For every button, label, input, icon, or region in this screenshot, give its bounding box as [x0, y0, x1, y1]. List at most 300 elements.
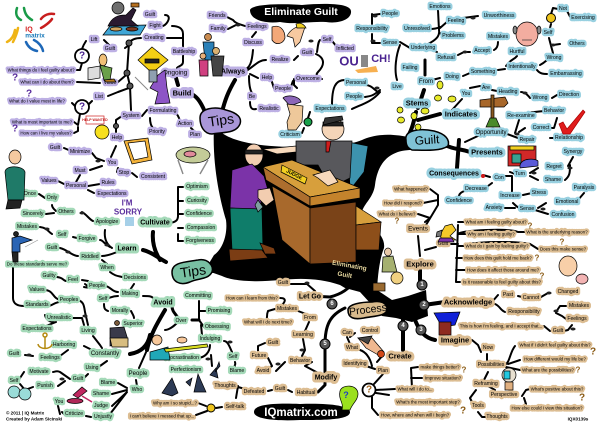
heading: Heading	[499, 89, 518, 95]
re-examine: Re-examine	[507, 113, 535, 119]
promising: Promising	[208, 308, 230, 314]
icon: green head with question	[340, 386, 358, 410]
changed: Changed	[558, 289, 578, 295]
guilt: Guilt	[145, 12, 156, 18]
plan: Plan	[378, 368, 388, 374]
explore: Explore	[406, 260, 434, 268]
control: Control	[362, 328, 378, 334]
harboring: Harboring	[53, 342, 75, 348]
question: What will I do next time?	[244, 320, 293, 324]
expectations: Expectations	[97, 191, 127, 197]
creating: Creating	[144, 35, 164, 41]
realize: Realize	[272, 57, 289, 63]
over: Over	[175, 318, 187, 324]
self: Self	[544, 30, 553, 36]
icon: sad baby	[559, 256, 588, 284]
apologize: Apologize	[96, 219, 118, 225]
relationship: Relationship	[555, 135, 583, 141]
node numbers: 2	[422, 302, 426, 308]
feeling: Feeling	[448, 18, 465, 24]
defeated: Defeated	[244, 389, 264, 395]
curiosity: Curiosity	[187, 198, 207, 204]
behavior: Behavior	[544, 108, 564, 114]
guilt: Guilt	[275, 386, 286, 392]
others: Others	[569, 41, 585, 47]
learn: Learn	[117, 246, 137, 252]
question: How does it affect those around me?	[467, 268, 540, 272]
stress: Stress	[532, 190, 547, 196]
presents: Presents	[471, 148, 503, 156]
value: Value	[104, 80, 116, 86]
question circles: ?	[79, 50, 85, 62]
morally: Morally	[112, 308, 129, 314]
icon: dark hats	[162, 362, 220, 396]
future: Future	[252, 353, 267, 359]
emotions: Emotions	[429, 4, 451, 10]
must: Must	[74, 168, 86, 174]
node numbers: 1	[420, 282, 424, 288]
self-talk: Self-talk	[226, 404, 245, 410]
refusal: Refusal	[437, 55, 455, 61]
mistakes: Mistakes	[17, 224, 37, 230]
blame: Blame	[230, 368, 244, 374]
stop: Stop	[119, 170, 129, 176]
always: Always	[221, 68, 245, 76]
icon: person with monitor	[502, 368, 516, 390]
gold question marks: ?	[560, 238, 565, 246]
question: What things do I feel guilty about?	[8, 68, 75, 72]
doing: Doing	[445, 74, 459, 80]
guilt: Guilt	[268, 340, 279, 346]
branch: presents and consequences	[429, 148, 595, 218]
mistakes: Mistakes	[569, 303, 589, 309]
purple question marks: ?	[12, 72, 18, 84]
personal: Personal	[66, 183, 86, 189]
feel: Feel	[68, 277, 78, 283]
text: i'm sorry: SORRY	[114, 208, 143, 216]
icon: magician hat	[434, 312, 460, 335]
icon: signpost	[480, 95, 508, 127]
thoughts: Thoughts	[486, 414, 508, 420]
unrealistic: Unrealistic	[47, 315, 71, 321]
you: You	[108, 160, 116, 166]
lift: Lift	[91, 37, 98, 43]
problems: Problems	[442, 33, 464, 39]
possibilities: Possibilities	[478, 362, 505, 368]
branch: process tan	[130, 280, 462, 418]
icon: critic pointing	[283, 96, 303, 130]
text: i'm sorry	[114, 198, 143, 226]
people: People	[346, 94, 362, 100]
living: Living	[81, 328, 95, 334]
behavior: Behavior	[290, 358, 310, 364]
icon: gavel	[67, 387, 92, 404]
overcome: Overcome	[296, 76, 320, 82]
stems: Stems	[406, 98, 428, 108]
icon: red check mark	[559, 110, 585, 134]
decrease: Decrease	[465, 186, 487, 192]
feelings: Feelings	[40, 355, 60, 361]
text: ouch with foot	[339, 53, 391, 73]
question: What will I do to...	[397, 386, 433, 392]
text: ouch with foot: OU	[339, 54, 359, 68]
green node	[304, 118, 312, 126]
rules: Rules	[101, 180, 115, 186]
synergy: Synergy	[564, 149, 583, 155]
icon: warning sign and knight	[135, 47, 170, 104]
icon: presenter silhouette	[12, 232, 38, 262]
let go: Let Go	[299, 294, 321, 300]
gold question marks: ?	[579, 392, 585, 404]
guilt: Guilt	[47, 245, 58, 251]
question: How does this guilt hold me back?	[464, 256, 532, 260]
direction: Direction	[559, 92, 579, 98]
icon: frustrated man with papers	[88, 54, 116, 82]
question: Improve situation?	[425, 376, 462, 380]
procrastination: Procrastination	[165, 355, 199, 361]
node numbers	[323, 282, 426, 347]
indulging: Indulging	[200, 336, 220, 342]
accept: Accept	[474, 48, 490, 54]
underlying: Underlying	[411, 45, 435, 51]
making: Making	[122, 291, 138, 297]
cultivate: Cultivate	[140, 220, 170, 226]
icon: man reclining	[150, 335, 208, 360]
riddled: Riddled	[81, 254, 99, 260]
responsibility: Responsibility	[356, 26, 388, 32]
credit: Created by Adam Sicinski	[6, 416, 62, 422]
discuss: Discuss	[244, 40, 262, 46]
red node	[481, 174, 485, 178]
fight: Fight	[149, 23, 161, 29]
criticism: Criticism	[280, 132, 300, 138]
question: How can I learn from this?	[226, 296, 278, 300]
hurtful: Hurtful	[509, 49, 525, 55]
branch: cultivate learn	[7, 184, 244, 420]
title	[250, 4, 351, 23]
priority: Priority	[149, 129, 165, 135]
map code: IQX0139s	[568, 416, 589, 422]
opportunity: Opportunity	[475, 130, 507, 136]
build: Build	[173, 88, 192, 98]
logo: iq matrix: IQ	[25, 26, 33, 34]
guilt: Guilt	[50, 145, 61, 151]
criticize: Criticize	[65, 411, 83, 417]
action: Action	[178, 121, 192, 127]
now: Now	[483, 345, 493, 351]
icon: teal heads	[8, 386, 31, 400]
guilt heading: Guilt	[414, 132, 440, 148]
help: Help	[262, 75, 272, 81]
are: Are	[482, 85, 490, 91]
question: What is most important to me?	[12, 120, 73, 124]
icon: green suited man	[5, 150, 25, 209]
how did i respond: How did I respond?	[384, 200, 423, 206]
friends: Friends	[208, 13, 226, 19]
question node	[362, 384, 376, 396]
superior: Superior	[123, 321, 143, 327]
values: Values	[41, 178, 57, 184]
icon: family group	[199, 34, 224, 76]
motivate: Motivate	[29, 369, 49, 375]
confidence: Confidence	[186, 211, 212, 217]
purple question marks: ?	[12, 124, 18, 134]
question node: ?	[366, 384, 372, 396]
numbered nodes	[320, 280, 429, 349]
inflicted: Inflicted	[336, 46, 354, 52]
central scene: judge and defendant	[229, 116, 381, 264]
what do i believe: What do I believe?	[379, 212, 416, 216]
indicates: Indicates	[445, 110, 477, 118]
increase: Increase	[500, 193, 520, 199]
purple question marks: ?	[26, 88, 32, 100]
self: Self	[10, 378, 19, 384]
correct: Correct	[533, 125, 550, 131]
logo: iq matrix	[7, 8, 54, 51]
shame: Shame	[545, 177, 561, 183]
modify: Modify	[315, 374, 337, 382]
values: Values	[29, 287, 45, 293]
question: How different would my life be?	[524, 356, 586, 362]
something: Something	[471, 69, 495, 75]
yellow node	[207, 404, 215, 412]
events: Events	[408, 226, 429, 232]
guilty: Guilty	[42, 273, 56, 279]
people: People	[275, 86, 291, 92]
connector lines	[418, 189, 572, 417]
failing: Failing	[402, 65, 418, 71]
realistic: Realistic	[259, 106, 279, 112]
gold question marks	[395, 216, 596, 416]
blame: Blame	[101, 380, 115, 386]
people: People	[382, 11, 398, 17]
guilt: Guilt	[73, 376, 84, 382]
gold question marks: ?	[528, 222, 533, 230]
paralysis: Paralysis	[574, 185, 595, 191]
mistakes: Mistakes	[488, 34, 508, 40]
process heading: Process	[348, 302, 388, 318]
question circles: ?	[79, 102, 85, 112]
wrong: Wrong	[533, 95, 548, 101]
connector lines	[225, 16, 337, 109]
can: Can	[342, 330, 352, 336]
text: eliminating guilt: Guilt	[337, 271, 353, 280]
question: What are the possibilities?	[522, 368, 574, 372]
text: ouch with foot: CH!	[371, 53, 391, 65]
branch: guilt stems and indicates	[280, 4, 595, 150]
avoid: Avoid	[257, 368, 269, 374]
confidence: Confidence	[446, 198, 472, 204]
icon: anchor	[38, 333, 52, 349]
from: From	[419, 79, 433, 85]
node numbers: 4	[401, 323, 405, 329]
thoughts: Thoughts	[214, 383, 236, 389]
regret: Regret	[546, 164, 562, 170]
repair: Repair	[519, 137, 535, 143]
icon: gavel judge	[103, 2, 146, 35]
intentionally: Intentionally	[508, 64, 536, 70]
connector lines	[196, 284, 422, 415]
forgiveness: Forgiveness	[186, 238, 214, 244]
list: List	[95, 94, 104, 100]
punish: Punish	[37, 383, 53, 389]
question: Why am I feeling guilty?	[467, 232, 515, 236]
live: Live	[392, 84, 402, 90]
when: When	[100, 265, 114, 271]
question circles	[75, 49, 89, 114]
consistent: Consistent	[141, 174, 166, 180]
question: Does this make sense?	[540, 246, 587, 252]
unresolved: Unresolved	[404, 26, 430, 32]
guilt: Guilt	[438, 241, 449, 247]
battleship: Battleship	[173, 49, 195, 55]
formulating: Formulating	[150, 108, 177, 114]
anxiety: Anxiety	[486, 205, 503, 211]
you: You	[55, 399, 63, 405]
gold question marks: ?	[462, 366, 467, 374]
what: What	[346, 345, 359, 351]
from: From	[304, 315, 316, 321]
text: eliminating guilt	[330, 260, 367, 282]
gold question marks: ?	[395, 216, 400, 226]
others: Others	[58, 209, 74, 215]
gold question marks: ?	[540, 272, 545, 280]
question: What's positive about this?	[531, 386, 584, 392]
question: How else could I view this situation?	[511, 406, 583, 410]
learning: Learning	[293, 332, 313, 338]
shame: Shame	[93, 391, 109, 397]
not: Not	[559, 6, 568, 12]
using: Using	[85, 365, 99, 371]
website banner	[254, 404, 350, 420]
purple question marks	[12, 72, 32, 134]
question: How, where and when will I begin?	[381, 412, 450, 418]
compassion: Compassion	[187, 225, 215, 231]
desk: JUDGE	[285, 168, 304, 182]
embarrassing: Embarrassing	[550, 71, 582, 77]
imagine: Imagine	[441, 336, 469, 344]
icon: hand with feather	[358, 336, 384, 358]
identifying: Identifying	[343, 361, 367, 367]
judge chair	[348, 142, 368, 190]
perspective: Perspective	[491, 392, 517, 398]
con: Con	[494, 175, 504, 181]
credit: © 2011 | IQ Matrix	[6, 410, 45, 416]
perfectionism: Perfectionism	[171, 367, 201, 373]
icon: green head with question: ?	[343, 390, 349, 400]
tips heading purple: Tips	[207, 110, 235, 130]
gold question marks: ?	[590, 346, 596, 358]
create: Create	[388, 352, 412, 360]
consequences: Consequences	[429, 170, 479, 178]
feelings: Feelings	[247, 24, 267, 30]
tools: Tools	[472, 403, 484, 409]
ongoing: Ongoing	[163, 70, 188, 76]
sincerely: Sincerely	[23, 211, 44, 217]
expectations: Expectations	[22, 326, 52, 332]
icon: green plant branch	[397, 81, 456, 130]
question: Is it reasonable to feel guilty about this?	[463, 280, 542, 284]
forgive: Forgive	[78, 236, 96, 242]
text: eliminating guilt: Eliminating	[331, 260, 367, 273]
expectations: Expectations	[315, 106, 345, 112]
defendant	[229, 144, 276, 261]
node numbers: 6	[330, 301, 334, 307]
question: What's the most important step?	[396, 400, 460, 404]
tips heading green	[172, 260, 212, 284]
icon: help wanted smiley: HELP WANTED	[82, 118, 108, 122]
question: How can I live my values?	[20, 130, 72, 136]
desk	[263, 160, 381, 264]
people: People	[129, 371, 148, 377]
icon: store and car	[508, 146, 538, 168]
question: Why am I so stupid...?	[153, 400, 197, 406]
connector lines	[459, 157, 584, 214]
help: Help	[112, 135, 122, 141]
committing: Committing	[185, 293, 211, 299]
guilt heading	[406, 130, 448, 150]
icon: globe on table	[176, 147, 210, 174]
responsibility: Responsibility	[508, 309, 540, 315]
family: Family	[210, 26, 226, 32]
text: i'm sorry: I'M	[122, 198, 133, 208]
only: Only	[47, 195, 58, 201]
what happened: What happened?	[394, 186, 428, 192]
obsessing: Obsessing	[205, 324, 229, 330]
icon: seated man	[110, 320, 128, 347]
be: Be	[249, 94, 255, 100]
question: What if I didn't feel guilty about this?	[520, 342, 591, 348]
system: System	[123, 113, 139, 119]
credit	[6, 410, 62, 422]
icon: arguing heads	[272, 23, 306, 47]
reframing: Reframing	[474, 381, 498, 387]
branch: always	[200, 13, 354, 134]
self: Self	[58, 232, 67, 238]
confusion: Confusion	[552, 212, 575, 218]
icon: help wanted smiley	[82, 116, 109, 139]
central black trunk	[130, 60, 470, 392]
yellow node	[546, 14, 556, 22]
acknowledge: Acknowledge	[444, 298, 492, 306]
who: Who	[132, 387, 142, 393]
cannot: Cannot	[523, 295, 540, 301]
unworthiness: Unworthiness	[484, 13, 515, 19]
self: Self	[229, 354, 238, 360]
self: Self	[323, 37, 332, 43]
tips heading purple	[200, 108, 240, 134]
icon: old man and globe	[373, 248, 403, 291]
icon: devil reading	[436, 224, 456, 242]
decisions: Decisions	[124, 275, 146, 281]
optimism: Optimism	[186, 184, 208, 190]
question: What do I gain by feeling guilty?	[466, 244, 529, 248]
gold question marks: ?	[460, 406, 466, 416]
gold question marks: ?	[576, 366, 581, 374]
guilt: Guilt	[105, 46, 116, 52]
unjustly: Unjustly	[94, 414, 113, 420]
once: Once	[24, 191, 36, 197]
statement: This is how I'm feeling, and I accept that...	[460, 324, 542, 328]
sense: Sense	[520, 206, 534, 212]
judge: Judge	[94, 403, 108, 409]
guilt: Guilt	[278, 280, 289, 286]
statement: I can't believe I messed that up...	[130, 414, 194, 418]
feelings: Feelings	[567, 316, 587, 322]
constantly: Constantly	[91, 351, 119, 357]
peoples: Peoples	[60, 297, 79, 303]
guilt: Guilt	[9, 351, 20, 357]
